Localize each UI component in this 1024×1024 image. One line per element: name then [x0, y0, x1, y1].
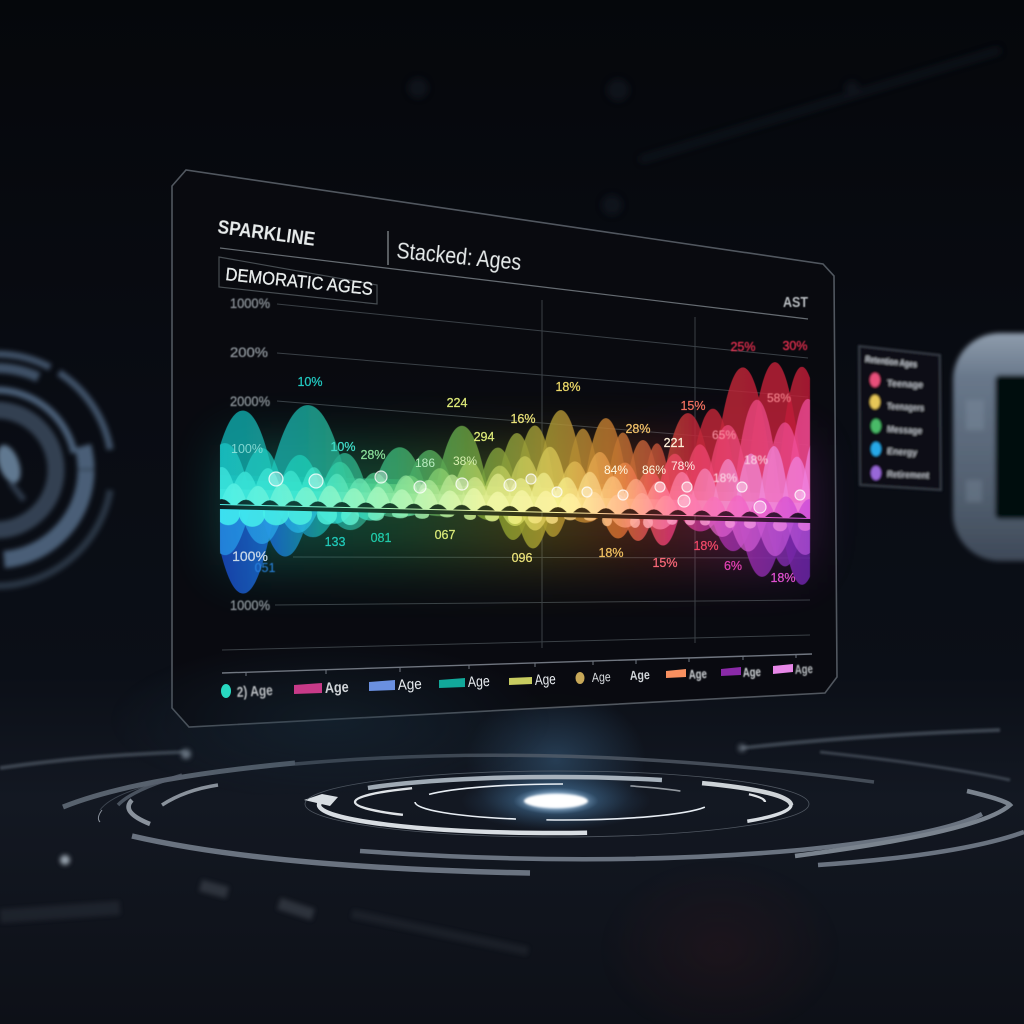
blurred background streaks: [408, 50, 1000, 215]
icon: right blurred device frame: [966, 354, 1024, 540]
value labels: 15%: [680, 399, 706, 413]
value labels: 186: [415, 456, 435, 470]
value labels: 18%: [744, 453, 768, 467]
value labels: 294: [474, 430, 494, 444]
value labels: 051: [255, 561, 275, 575]
panel: side legend: Retention Ages: [865, 354, 918, 369]
y-axis labels: 1000%: [230, 295, 270, 311]
chart colour glow: [225, 445, 805, 565]
far background arcs: [0, 730, 1010, 780]
panel: side legend: Message: [887, 424, 922, 436]
grid lines: [222, 300, 810, 650]
faint thin ring: [305, 771, 809, 837]
legend: age categories: Age: [591, 669, 611, 685]
mid ring arcs: [355, 782, 765, 822]
legend: age categories: 2) Age: [236, 682, 273, 701]
value labels: 65%: [712, 428, 736, 442]
value labels: 38%: [453, 454, 477, 468]
wave layers: [220, 362, 810, 594]
floor bokeh marks: [0, 744, 746, 956]
icon: left circular dial: [0, 354, 112, 586]
thick bright ring: [304, 777, 791, 833]
panel: side legend: Retirement: [887, 469, 929, 480]
legend: age categories: Age: [397, 676, 422, 694]
panel corner sheen: [183, 670, 476, 789]
x axis: [222, 654, 812, 676]
value labels: 18%: [598, 546, 624, 560]
value labels: 100%: [232, 548, 268, 564]
legend: age categories: [221, 661, 813, 701]
value labels: 18%: [693, 539, 719, 553]
legend: age categories: Age: [324, 679, 349, 697]
value labels: [231, 339, 808, 585]
y-axis labels: 1000%: [230, 597, 270, 613]
panel: side legend: Teenage: [887, 378, 923, 390]
value labels: 100%: [231, 442, 263, 456]
central light glow: [461, 690, 651, 831]
value labels: 30%: [782, 339, 808, 353]
legend: age categories: Age: [629, 667, 650, 683]
value labels: 18%: [555, 380, 581, 394]
legend: age categories: Age: [534, 671, 556, 689]
legend: age categories: Age: [794, 661, 813, 677]
value labels: 78%: [671, 459, 695, 473]
y-axis labels: 2000%: [230, 393, 270, 409]
value labels: 28%: [360, 448, 386, 462]
value labels: 224: [447, 396, 467, 410]
value labels: 067: [435, 528, 455, 542]
panel: side legend: Teenagers: [887, 401, 924, 413]
label: AST: AST: [783, 294, 808, 311]
value labels: 84%: [604, 463, 628, 477]
heading: Stacked Ages: Stacked: Ages: [396, 237, 522, 275]
panel: side legend: [859, 346, 941, 490]
y-axis labels: 200%: [230, 344, 268, 360]
value labels: 25%: [730, 340, 756, 354]
value labels: 081: [371, 531, 391, 545]
value labels: 10%: [297, 375, 323, 389]
outer segmented ring: [63, 755, 1024, 873]
inner thin ring: [415, 784, 711, 820]
heading: SPARKLINE: SPARKLINE: [216, 217, 316, 251]
value labels: 28%: [625, 422, 651, 436]
legend: age categories: Age: [467, 673, 490, 691]
stacked wave chart: [220, 335, 810, 618]
red floor reflection: [600, 860, 840, 1024]
data point markers: [269, 471, 805, 513]
subheading box: DEMORATIC AGES: DEMORATIC AGES: [225, 264, 374, 299]
value labels: 18%: [713, 471, 737, 485]
y-axis labels: [230, 295, 270, 613]
value labels: 096: [512, 551, 532, 565]
panel: main holographic chart: [110, 170, 837, 800]
header line and dividers: [220, 231, 808, 319]
legend: age categories: Age: [742, 664, 761, 680]
legend: age categories: Age: [688, 666, 707, 682]
value labels: 16%: [510, 412, 536, 426]
value labels: 6%: [724, 559, 742, 573]
value labels: 58%: [767, 391, 791, 405]
value labels: 133: [325, 535, 345, 549]
value labels: 18%: [770, 571, 796, 585]
value labels: 15%: [652, 556, 678, 570]
floor rings: [0, 690, 1024, 873]
panel: side legend: Energy: [887, 446, 917, 458]
value labels: 221: [664, 436, 684, 450]
panel frame: [172, 170, 837, 727]
value labels: 86%: [642, 463, 666, 477]
value labels: 10%: [330, 440, 356, 454]
